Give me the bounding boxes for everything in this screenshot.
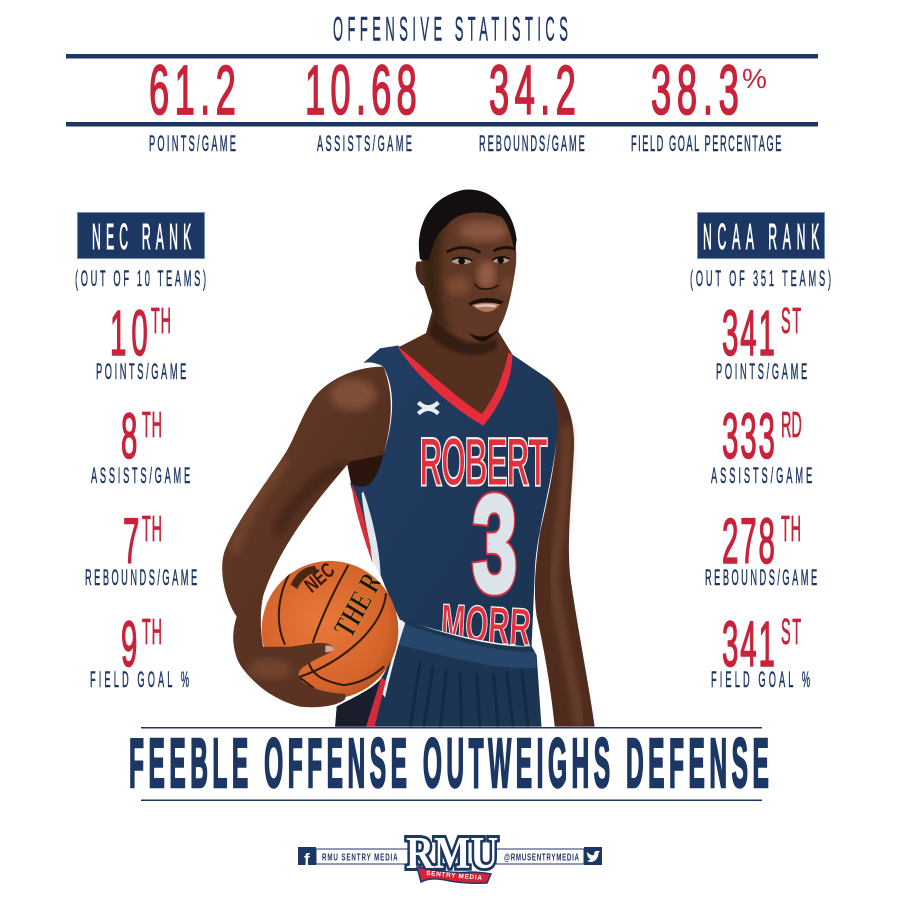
NEC subheading: (OUT OF 10 TEAMS) <box>75 266 206 291</box>
panel: NEC rank <box>75 212 206 692</box>
NCAA rebounds rank: REBOUNDS/GAME <box>705 565 817 590</box>
NCAA field goal rank: FIELD GOAL % <box>711 667 810 692</box>
jersey side stripes <box>362 492 381 576</box>
stat: assists per game: 10.68 <box>305 51 417 129</box>
NEC points rank: POINTS/GAME <box>96 359 186 384</box>
NEC rebounds rank: REBOUNDS/GAME <box>85 565 197 590</box>
player right arm <box>535 379 595 729</box>
eyes <box>452 257 509 264</box>
NEC assists rank: ASSISTS/GAME <box>91 463 190 488</box>
twitter credit <box>496 847 602 865</box>
jersey number <box>471 491 517 597</box>
player hand <box>234 642 346 708</box>
footer: social credits and logo <box>298 828 602 883</box>
top stats band <box>66 51 818 156</box>
NEC rank heading box <box>78 212 204 258</box>
NCAA rebounds rank: 278 <box>722 505 775 577</box>
NEC field goal rank: FIELD GOAL % <box>90 667 189 692</box>
player torso under arm <box>347 451 384 487</box>
NEC points rank: TH <box>151 300 171 341</box>
NCAA rank heading box: NCAA RANK <box>703 217 819 257</box>
NCAA assists rank <box>711 400 812 488</box>
shorts stripes <box>382 620 405 697</box>
NEC field goal rank: TH <box>142 611 162 652</box>
basketball printed THE ROCK: THE ROCK <box>327 523 413 643</box>
NCAA points rank: POINTS/GAME <box>716 359 807 384</box>
player head <box>416 189 517 342</box>
stat: field goal percentage: 38.3 <box>651 51 739 129</box>
stat: rebounds per game: 34.2 <box>489 51 576 129</box>
NCAA points rank: 341 <box>722 297 775 369</box>
jersey lettering MORRIS: MORRIS <box>439 594 560 659</box>
stat: field goal percentage: FIELD GOAL PERCENTAGE <box>631 131 781 156</box>
jersey collar <box>397 345 512 426</box>
NEC rank heading box: NEC RANK <box>92 217 191 257</box>
NCAA points rank <box>716 297 807 384</box>
stat: points per game: POINTS/GAME <box>149 131 236 156</box>
RMU logo: RMU <box>406 828 498 879</box>
player left arm <box>222 367 391 669</box>
stat: points per game: 61.2 <box>149 51 236 129</box>
NCAA field goal rank: 341 <box>722 608 775 680</box>
stat: assists per game: ASSISTS/GAME <box>317 131 412 156</box>
NCAA subheading: (OUT OF 351 TEAMS) <box>690 266 831 291</box>
jersey number: 3 <box>472 467 517 620</box>
NCAA assists rank: RD <box>781 404 802 445</box>
NEC points rank <box>96 297 186 384</box>
NEC field goal rank: 9 <box>121 608 137 680</box>
NEC points rank: 10 <box>110 297 148 369</box>
nose <box>475 284 499 289</box>
NCAA field goal rank: ST <box>781 611 801 652</box>
basketball <box>262 560 398 697</box>
mouth <box>468 298 504 312</box>
stat: rebounds per game <box>479 51 585 156</box>
facebook credit: RMU SENTRY MEDIA <box>322 851 398 863</box>
jersey number: 3 <box>472 467 517 620</box>
RMU logo: SENTRY MEDIA <box>426 870 483 882</box>
NEC assists rank: TH <box>142 404 162 445</box>
NCAA points rank: ST <box>781 300 801 341</box>
jersey lettering ROBERT: ROBERT <box>419 425 548 501</box>
goatee <box>468 328 500 342</box>
NEC rebounds rank: TH <box>142 508 162 549</box>
hair <box>419 189 517 261</box>
NCAA assists rank: ASSISTS/GAME <box>711 463 812 488</box>
NEC assists rank: 8 <box>121 400 137 472</box>
twitter credit: @RMUSENTRYMEDIA <box>504 851 579 863</box>
stat: field goal percentage <box>631 51 781 156</box>
NEC rebounds rank: 7 <box>123 505 139 577</box>
NCAA assists rank: 333 <box>722 400 775 472</box>
jersey logo <box>418 402 438 414</box>
headline: feeble offense outweighs defense: FEEBLE OFFENSE OUTWEIGHS DEFENSE <box>129 726 769 803</box>
shorts <box>335 620 542 729</box>
stat: field goal percentage: % <box>742 63 767 94</box>
section title: offensive statistics: OFFENSIVE STATISTICS <box>333 11 568 48</box>
player photo illustration <box>222 189 595 729</box>
eyebrows <box>447 247 514 253</box>
jersey <box>350 345 560 659</box>
NCAA rebounds rank <box>705 505 817 590</box>
NEC assists rank <box>91 400 190 488</box>
facebook credit <box>298 847 411 869</box>
panel: NCAA rank <box>690 212 831 692</box>
stat: rebounds per game: REBOUNDS/GAME <box>479 131 585 156</box>
NEC field goal rank <box>90 608 189 692</box>
player neck and chest <box>399 310 513 414</box>
NEC rebounds rank <box>85 505 197 590</box>
basketball printed NEC logo: NEC <box>300 558 339 597</box>
facebook credit: f <box>304 850 310 869</box>
NCAA rebounds rank: TH <box>781 508 801 549</box>
NCAA field goal rank <box>711 608 810 692</box>
